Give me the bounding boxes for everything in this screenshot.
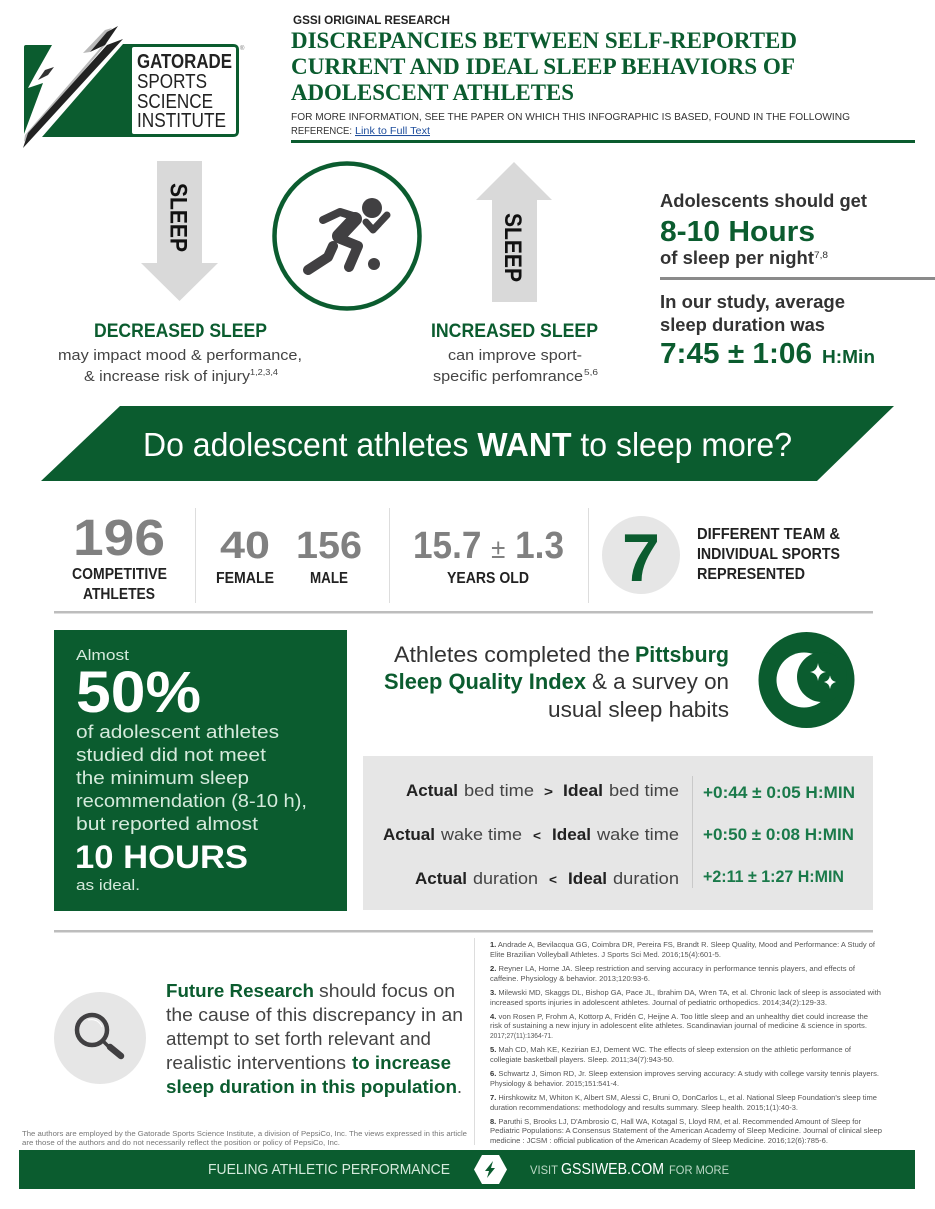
stat: sports represented: 7 (622, 520, 660, 596)
stat: competitive athletes: 196 (73, 509, 165, 566)
row: duration: duration (473, 869, 538, 888)
stat: competitive athletes: ATHLETES (83, 586, 155, 603)
text block: future research: attempt to set forth relevant and (166, 1029, 431, 1049)
text block: references: Elite Brazilian Volleyball Athletes. J Sports Sci Med. 2016;15(4):601-5. (490, 950, 721, 959)
row: bed time (406, 781, 855, 802)
text block: Pittsburgh sleep quality index (384, 642, 729, 722)
text block: decreased sleep (58, 321, 302, 385)
row: wake time: wake time (596, 825, 679, 844)
logo: Gatorade Sports Science Institute: SPORTS (137, 71, 207, 93)
text block: references: 5. Mah CD, Mah KE, Kezirian EJ, Dement WC. The effects of sleep extension on the athletic performance of (490, 1045, 852, 1054)
text block: references: 2017;27(11):1364-71. (490, 1031, 553, 1040)
callout: recommended and average sleep: of sleep per night (660, 248, 814, 268)
text block: future research: realistic interventions (166, 1053, 346, 1073)
logo: Gatorade Sports Science Institute: INSTITUTE (137, 110, 226, 132)
footer band: FOR MORE (669, 1163, 729, 1177)
stat: sports represented: DIFFERENT TEAM & (697, 526, 840, 543)
text block: disclaimer: are those of the authors and do not necessarily reflect the position or policy of PepsiCo, Inc. (22, 1138, 340, 1147)
text block: Pittsburgh sleep quality index: & a survey on (592, 669, 729, 694)
stat: male (296, 525, 362, 587)
callout: recommended and average sleep: Adolescents should get (660, 191, 867, 211)
row: wake time (383, 825, 854, 844)
header: study title block: Link to Full Text (355, 125, 430, 137)
text block: increased sleep: 5,6 (584, 368, 599, 377)
row: duration: +2:11 ± 1:27 H:MIN (703, 867, 844, 886)
row: wake time: +0:50 ± 0:08 H:MIN (703, 825, 854, 844)
text block: references (490, 940, 882, 1145)
stat: male: MALE (310, 570, 348, 587)
text block: references: 4. von Rosen P, Frohm A, Kottorp A, Fridén C, Heijne A. Too little sleep and an unhealthy diet could increase the (490, 1012, 868, 1021)
panel: almost 50 percent: recommendation (8-10 h), (76, 791, 307, 811)
row: wake time: wake time (440, 825, 522, 844)
text block: references: 7. Hirshkowitz M, Whiton K, Albert SM, Alessi C, Bruni O, DonCarlos L, et al. National Sleep Foundation's sleep time (490, 1093, 877, 1102)
icon: magnifying glass (54, 992, 146, 1084)
text block: references: collegiate basketball players. Sleep. 2011;34(7):943-50. (490, 1055, 674, 1064)
footer band: GSSIWEB.COM (561, 1161, 664, 1178)
text block: references: duration recommendations: methodology and results summary. Sleep health. 2015;1(1):40-3. (490, 1103, 798, 1112)
icon: runner with ball in circle (274, 164, 420, 308)
row: wake time: < (533, 828, 541, 843)
logo: Gatorade Sports Science Institute: SCIENCE (137, 91, 213, 113)
panel: actual vs ideal table (363, 756, 873, 910)
banner: main question (41, 406, 894, 481)
row: wake time: Ideal (552, 825, 591, 844)
text block: Pittsburgh sleep quality index: Athletes completed the (394, 642, 630, 667)
row: bed time: bed time (609, 781, 679, 800)
arrow: decreased sleep (141, 161, 218, 301)
arrow: decreased sleep: SLEEP (164, 183, 192, 252)
logo: Gatorade Sports Science Institute: GATORADE (137, 51, 232, 73)
banner: main question: Do adolescent athletes WANT to sleep more? (143, 426, 792, 463)
text block: increased sleep: specific perfomrance (433, 368, 583, 385)
text block: decreased sleep: 1,2,3,4 (250, 368, 279, 377)
title: DISCREPANCIES BETWEEN SELF-REPORTED (291, 28, 797, 53)
text block: references: 3. Milewski MD, Skaggs DL, Bishop GA, Pace JL, Ibrahim DA, Wren TA, et al. Chronic lack of sleep is associated with (490, 988, 881, 997)
panel: almost 50 percent: Almost (76, 648, 129, 664)
text block: references: increased sports injuries in adolescent athletes. Journal of pediatric orthopedics. 2014;34(2):129-33. (490, 998, 827, 1007)
row: bed time: Actual (406, 781, 458, 800)
panel: almost 50 percent: studied did not meet (76, 745, 266, 765)
panel: almost 50 percent: of adolescent athletes (76, 722, 279, 742)
text block: references: Pediatric Populations: A Consensus Statement of the American Academy of Sleep Medicine. Journal of clinical sleep (490, 1126, 882, 1135)
callout: recommended and average sleep: In our study, average (660, 292, 845, 312)
stat: competitive athletes (72, 509, 167, 603)
header: study title block (291, 13, 915, 143)
text block: future research: Future Research (166, 981, 314, 1001)
text block: future research: the cause of this discrepancy in an (166, 1005, 463, 1025)
row: bed time: +0:44 ± 0:05 H:MIN (703, 783, 855, 802)
stat: female: 40 (220, 525, 270, 567)
row: duration (415, 867, 844, 888)
stat: competitive athletes: COMPETITIVE (72, 566, 167, 583)
row: duration: Actual (415, 869, 467, 888)
panel: participant stats (54, 508, 873, 614)
text block: references: medicine : JCSM : official publication of the American Academy of Sleep Medicine. 2016;12(6):785-6. (490, 1136, 828, 1145)
text block: future research: sleep duration in this population (166, 1077, 457, 1097)
row: bed time: bed time (464, 781, 534, 800)
row: bed time: Ideal (563, 781, 603, 800)
stat: age: 15.7 ± 1.3 (413, 525, 564, 567)
title: ADOLESCENT ATHLETES (291, 80, 574, 105)
icon: hexagon bolt (474, 1155, 507, 1184)
stat: female (216, 525, 274, 587)
text block: references: 2. Reyner LA, Horne JA. Sleep restriction and serving accuracy in performance tennis players, and effects of (490, 964, 856, 973)
footer band (19, 1150, 915, 1189)
text block: future research: should focus on (319, 981, 455, 1001)
panel: almost 50 percent (54, 630, 347, 911)
stat: age: YEARS OLD (447, 570, 529, 587)
stat: sports represented: INDIVIDUAL SPORTS (697, 546, 840, 563)
row: wake time: Actual (383, 825, 435, 844)
stat: sports represented: REPRESENTED (697, 566, 805, 583)
callout: recommended and average sleep (660, 191, 935, 370)
text block: increased sleep: INCREASED SLEEP (431, 321, 598, 342)
panel: almost 50 percent: but reported almost (76, 814, 258, 834)
text block: references: Physiology & behavior. 2015;151:541-4. (490, 1079, 619, 1088)
text block: references: 1. Andrade A, Bevilacqua GG, Coimbra DR, Pereira FS, Brandt R. Sleep Quality, Mood and Performance: A Study of (490, 940, 876, 949)
text block: references: risk of sustaining a new injury in adolescent elite athletes. Scandinavian journal of medicine & science in sports. (490, 1021, 867, 1030)
callout: recommended and average sleep: 7,8 (814, 250, 828, 260)
text block: increased sleep (431, 321, 599, 385)
panel: almost 50 percent: 10 HOURS (75, 839, 248, 875)
text block: future research (166, 981, 463, 1097)
callout: recommended and average sleep: H:Min (822, 347, 875, 367)
logo: Gatorade Sports Science Institute: ® (240, 45, 245, 52)
stat: male: 156 (296, 525, 362, 567)
panel: almost 50 percent: as ideal. (76, 878, 140, 894)
callout: recommended and average sleep: 8-10 Hours (660, 216, 815, 248)
arrow: increased sleep: SLEEP (499, 213, 526, 282)
text block: disclaimer (22, 1129, 467, 1147)
text block: disclaimer: The authors are employed by the Gatorade Sports Science Institute, a division of PepsiCo, Inc. The views expressed in this article (22, 1129, 467, 1138)
stat: age (413, 525, 564, 587)
text block: Pittsburgh sleep quality index: Pittsburg (635, 642, 729, 667)
title (291, 28, 797, 105)
row: bed time: > (544, 784, 553, 799)
title: CURRENT AND IDEAL SLEEP BEHAVIORS OF (291, 54, 795, 79)
footer band: VISIT (530, 1163, 559, 1177)
header: study title block: GSSI ORIGINAL RESEARCH (293, 13, 450, 27)
text block: future research: . (457, 1077, 462, 1097)
text block: references: 6. Schwartz J, Simon RD, Jr. Sleep extension improves serving accuracy: A study with college varsity tennis players. (490, 1069, 879, 1078)
text block: decreased sleep: & increase risk of injury (84, 368, 251, 385)
text block: references: 8. Paruthi S, Brooks LJ, D'Ambrosio C, Hall WA, Kotagal S, Lloyd RM, et al. Recommended Amount of Sleep for (490, 1117, 861, 1126)
panel: almost 50 percent: the minimum sleep (76, 768, 249, 788)
footer band: FUELING ATHLETIC PERFORMANCE (208, 1161, 450, 1178)
arrow: increased sleep (476, 162, 552, 302)
callout: recommended and average sleep: 7:45 ± 1:06 (660, 338, 812, 370)
text block: references: caffeine. Physiology & behavior. 2013;120:93-6. (490, 974, 650, 983)
text block: future research: to increase (352, 1053, 451, 1073)
text block: Pittsburgh sleep quality index: usual sleep habits (548, 697, 729, 722)
callout: recommended and average sleep: sleep duration was (660, 315, 825, 335)
stat: female: FEMALE (216, 570, 274, 587)
icon: moon and stars (758, 632, 854, 728)
panel: almost 50 percent: 50% (76, 660, 201, 725)
text block: Pittsburgh sleep quality index: Sleep Quality Index (384, 669, 587, 694)
stat: sports represented (602, 516, 840, 596)
text block: decreased sleep: DECREASED SLEEP (94, 321, 267, 342)
row: duration: duration (613, 869, 679, 888)
header: study title block: FOR MORE INFORMATION, SEE THE PAPER ON WHICH THIS INFOGRAPHIC IS BASED, FOUND IN THE FOLLOWING (291, 111, 850, 123)
logo: Gatorade Sports Science Institute (23, 26, 245, 148)
row: duration: < (549, 872, 557, 887)
text block: decreased sleep: may impact mood & performance, (58, 347, 302, 364)
text block: increased sleep: can improve sport- (448, 347, 582, 364)
header: study title block: REFERENCE: (291, 125, 352, 137)
row: duration: Ideal (568, 869, 607, 888)
